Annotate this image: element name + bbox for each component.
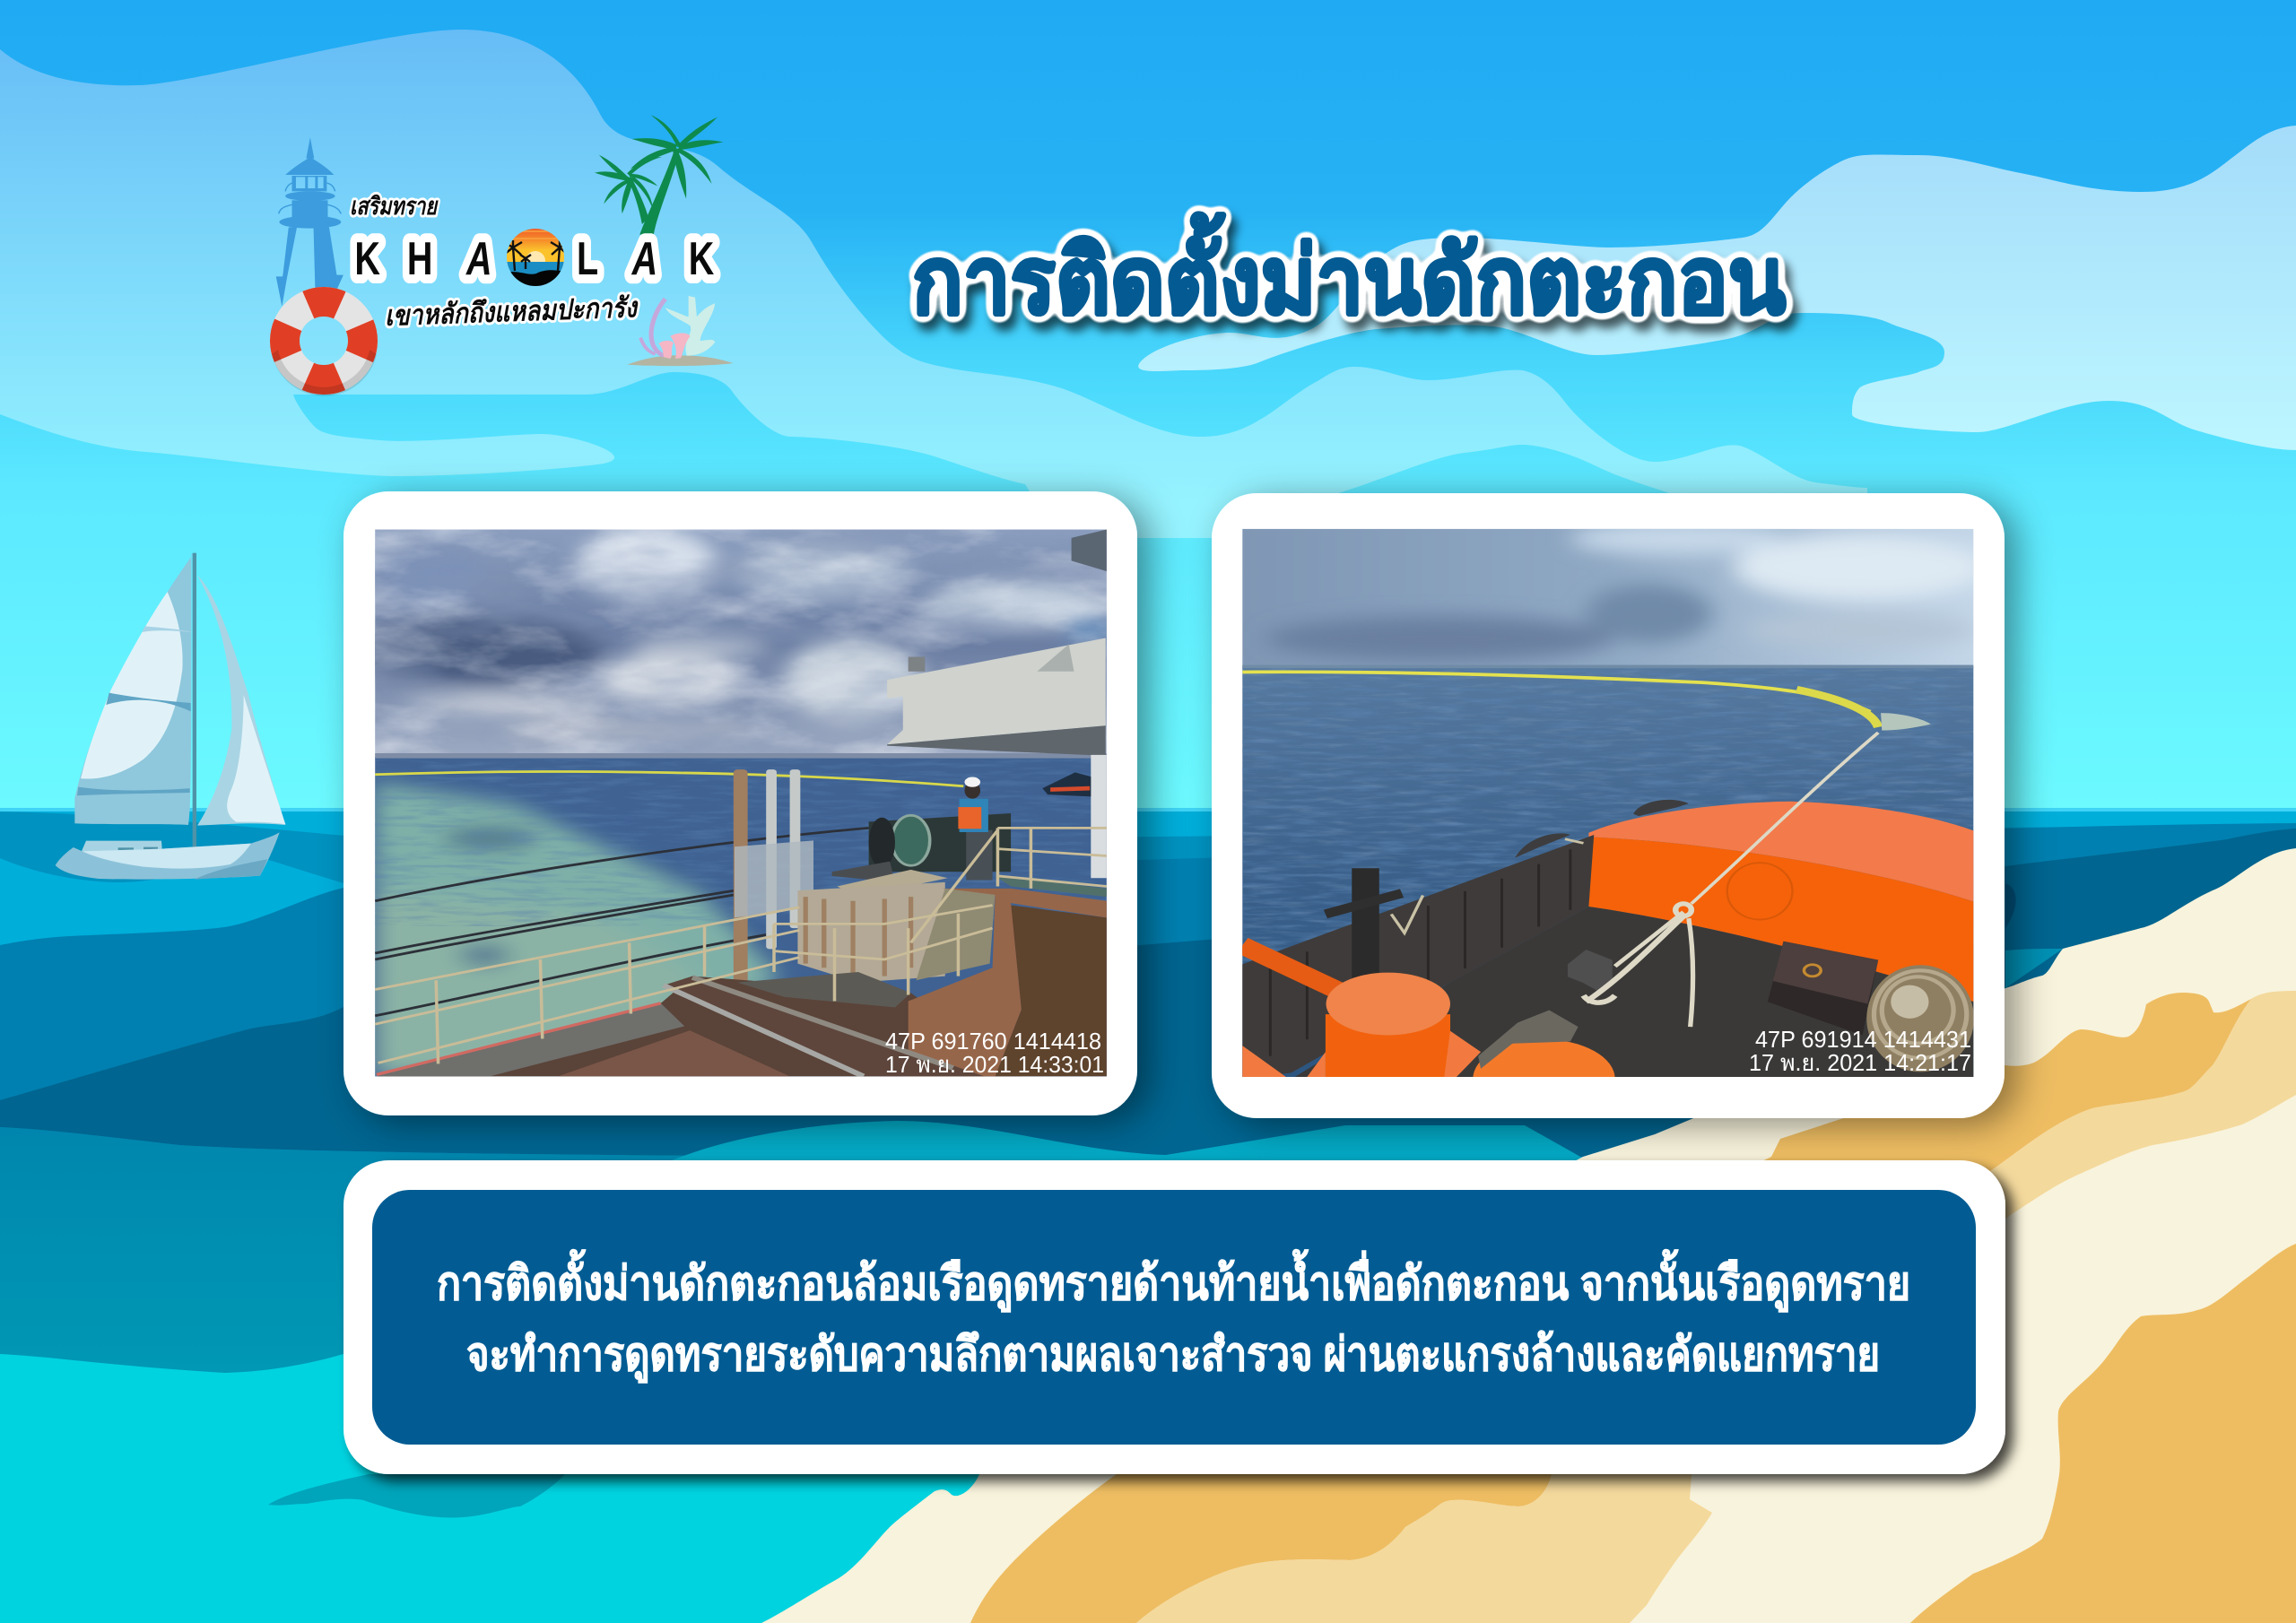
logo caption bottom: เขาหลักถึงแหลมปะการัง bbox=[384, 291, 639, 332]
logo wordmark: K bbox=[354, 232, 380, 284]
photo: dredger deck and sea bbox=[358, 527, 1116, 1079]
logo wordmark bbox=[354, 232, 714, 284]
logo caption top: เสริมทราย bbox=[350, 193, 439, 220]
logo: Khao Lak bbox=[272, 115, 734, 396]
icon: sunset badge bbox=[507, 229, 564, 286]
photo: boat towing silt curtain bbox=[1242, 522, 1986, 1119]
panel: description bbox=[344, 1160, 2005, 1474]
panel: photo right bbox=[1212, 493, 2005, 1119]
description box bbox=[372, 1190, 1976, 1445]
logo wordmark: H bbox=[407, 232, 432, 284]
icon: palm trees bbox=[595, 115, 723, 235]
logo wordmark: L bbox=[577, 232, 598, 284]
photo stamp: 47P 691760 1414418 bbox=[885, 1028, 1101, 1055]
background: beach bbox=[761, 848, 2296, 1623]
title: การติดตั้งม่านดักตะกอน bbox=[912, 213, 1786, 334]
photo stamp date: 17 พ.ย. 2021 14:33:01 bbox=[885, 1051, 1104, 1078]
icon: coral bbox=[627, 296, 734, 366]
background: sky and waves bbox=[0, 0, 2296, 816]
logo wordmark: K bbox=[689, 232, 714, 284]
photo stamp: 47P 691914 1414431 bbox=[1755, 1026, 1971, 1053]
logo wordmark: A bbox=[465, 232, 492, 284]
photo stamp date: 17 พ.ย. 2021 14:21:17 bbox=[1749, 1049, 1971, 1076]
background: ocean layers bbox=[0, 808, 2296, 1623]
icon: lighthouse bbox=[276, 137, 344, 307]
description line 1: การติดตั้งม่านดักตะกอนล้อมเรือดูดทรายด้านท้ายน้ำเพื่อดักตะกอน จากนั้นเรือดูดทราย bbox=[437, 1249, 1910, 1313]
icon: life ring bbox=[272, 301, 377, 396]
logo wordmark: A bbox=[631, 232, 657, 284]
description line 2: จะทำการดูดทรายระดับความลึกตามผลเจาะสำรวจ ผ่านตะแกรงล้างและคัดแยกทราย bbox=[466, 1329, 1880, 1384]
panel: photo left bbox=[344, 491, 1137, 1115]
icon: sailboat bbox=[56, 553, 285, 880]
